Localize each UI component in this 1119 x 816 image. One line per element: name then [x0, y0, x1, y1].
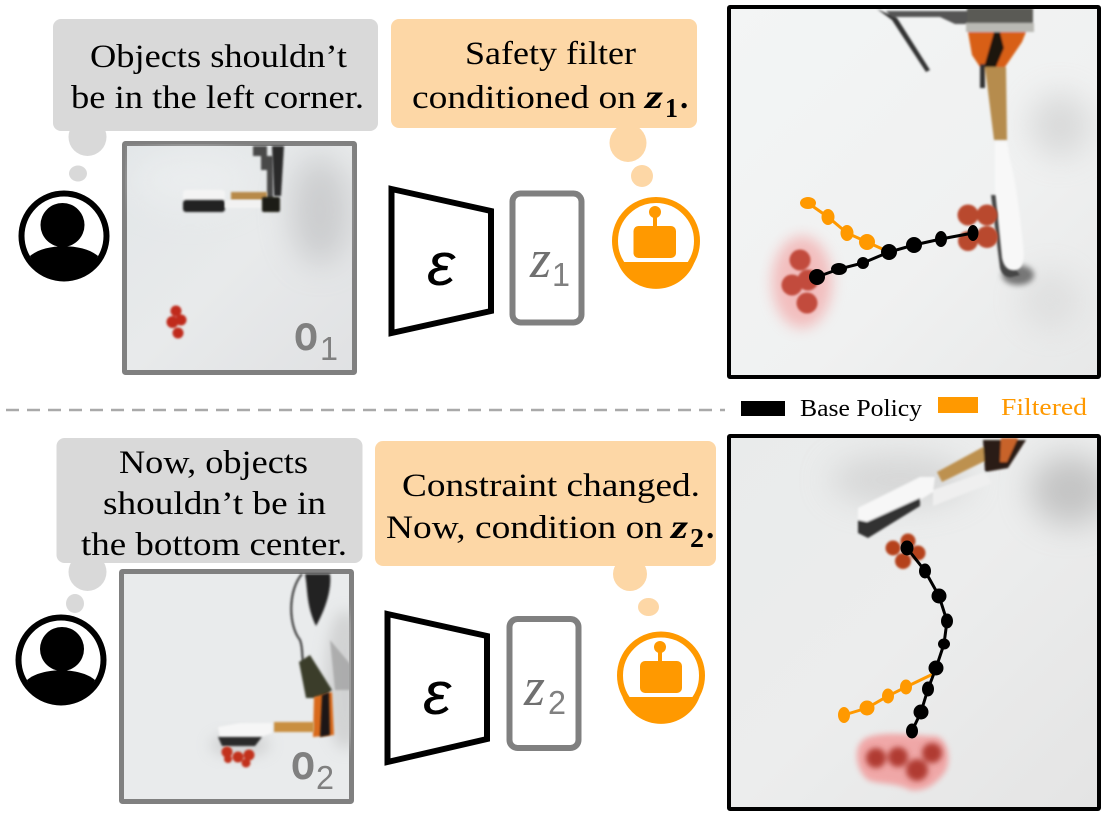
latent box z2 [510, 619, 578, 748]
speech bubble: constraint changed: . [706, 510, 714, 546]
legend: base policy: Base Policy [800, 396, 922, 422]
icon: person bottom [18, 618, 104, 705]
encoder trapezoid bottom [388, 614, 487, 762]
speech bubble: user bottom: shouldn’t be in [103, 486, 326, 522]
speech bubble: user bottom [56, 438, 362, 563]
label: o1: 1 [320, 330, 338, 367]
encoder trapezoid top: ε [427, 231, 457, 298]
label: o2: 2 [316, 759, 334, 796]
speech bubble: user top: Objects shouldn’t [90, 39, 347, 75]
result image top [729, 7, 1099, 377]
icon: robot top [615, 200, 697, 289]
icon: robot bottom [620, 634, 702, 724]
speech bubble: constraint changed: 2 [690, 523, 704, 553]
speech bubble: safety filter top: z [644, 79, 664, 116]
base trajectory [809, 225, 978, 285]
result image bottom [729, 436, 1110, 809]
legend: base policy [741, 396, 922, 422]
tomatoes bottom [866, 743, 942, 781]
dashed divider [6, 409, 725, 411]
latent box z1: 1 [552, 256, 570, 293]
speech bubble: user bottom: Now, objects [119, 445, 308, 481]
speech bubble: safety filter top: 1 [665, 93, 678, 123]
label: o2: o [291, 734, 315, 790]
speech bubble: constraint changed: Constraint changed. [402, 468, 700, 504]
speech bubble: constraint changed: z [670, 509, 689, 546]
filtered trajectory [800, 197, 889, 252]
latent box z1 [512, 194, 582, 322]
filtered trajectory [838, 674, 933, 723]
speech bubble: user top: be in the left corner. [71, 80, 364, 116]
thought dots: user top [68, 118, 106, 182]
thought dots: robot bottom [613, 557, 659, 616]
label: o2 [291, 734, 334, 796]
base trajectory [900, 540, 953, 738]
gripper and tool [858, 438, 1026, 538]
latent box z2: z [523, 657, 545, 717]
latent box z2: 2 [548, 684, 566, 721]
encoder trapezoid bottom: ε [423, 660, 453, 727]
observation image o2 [122, 572, 365, 802]
latent box z1: z [529, 229, 551, 289]
encoder trapezoid top [392, 189, 491, 333]
tomatoes right [958, 204, 998, 251]
constraint region [772, 236, 832, 328]
speech bubble: safety filter top [391, 19, 697, 128]
constraint region [857, 734, 948, 790]
speech bubble: constraint changed: Now, condition on [386, 510, 663, 546]
label: o1: o [294, 305, 318, 361]
thought dots: user bottom [66, 553, 106, 613]
icon: person top [22, 194, 106, 281]
tomatoes top [886, 534, 926, 569]
speech bubble: user top [53, 19, 378, 131]
speech bubble: safety filter top: Safety filter [465, 36, 636, 72]
gripper [877, 8, 1034, 140]
tomatoes left [782, 250, 818, 314]
legend [741, 395, 1087, 422]
speech bubble: safety filter top: . [680, 80, 688, 116]
legend: filtered: Filtered [1001, 395, 1087, 421]
observation image o1 [124, 144, 354, 372]
speech bubble: safety filter top: conditioned on [412, 80, 636, 116]
speech bubble: constraint changed [375, 441, 716, 566]
speech bubble: user bottom: the bottom center. [81, 527, 347, 563]
legend: filtered [938, 395, 1087, 421]
thought dots: robot top [610, 124, 653, 187]
label: o1 [294, 305, 338, 367]
